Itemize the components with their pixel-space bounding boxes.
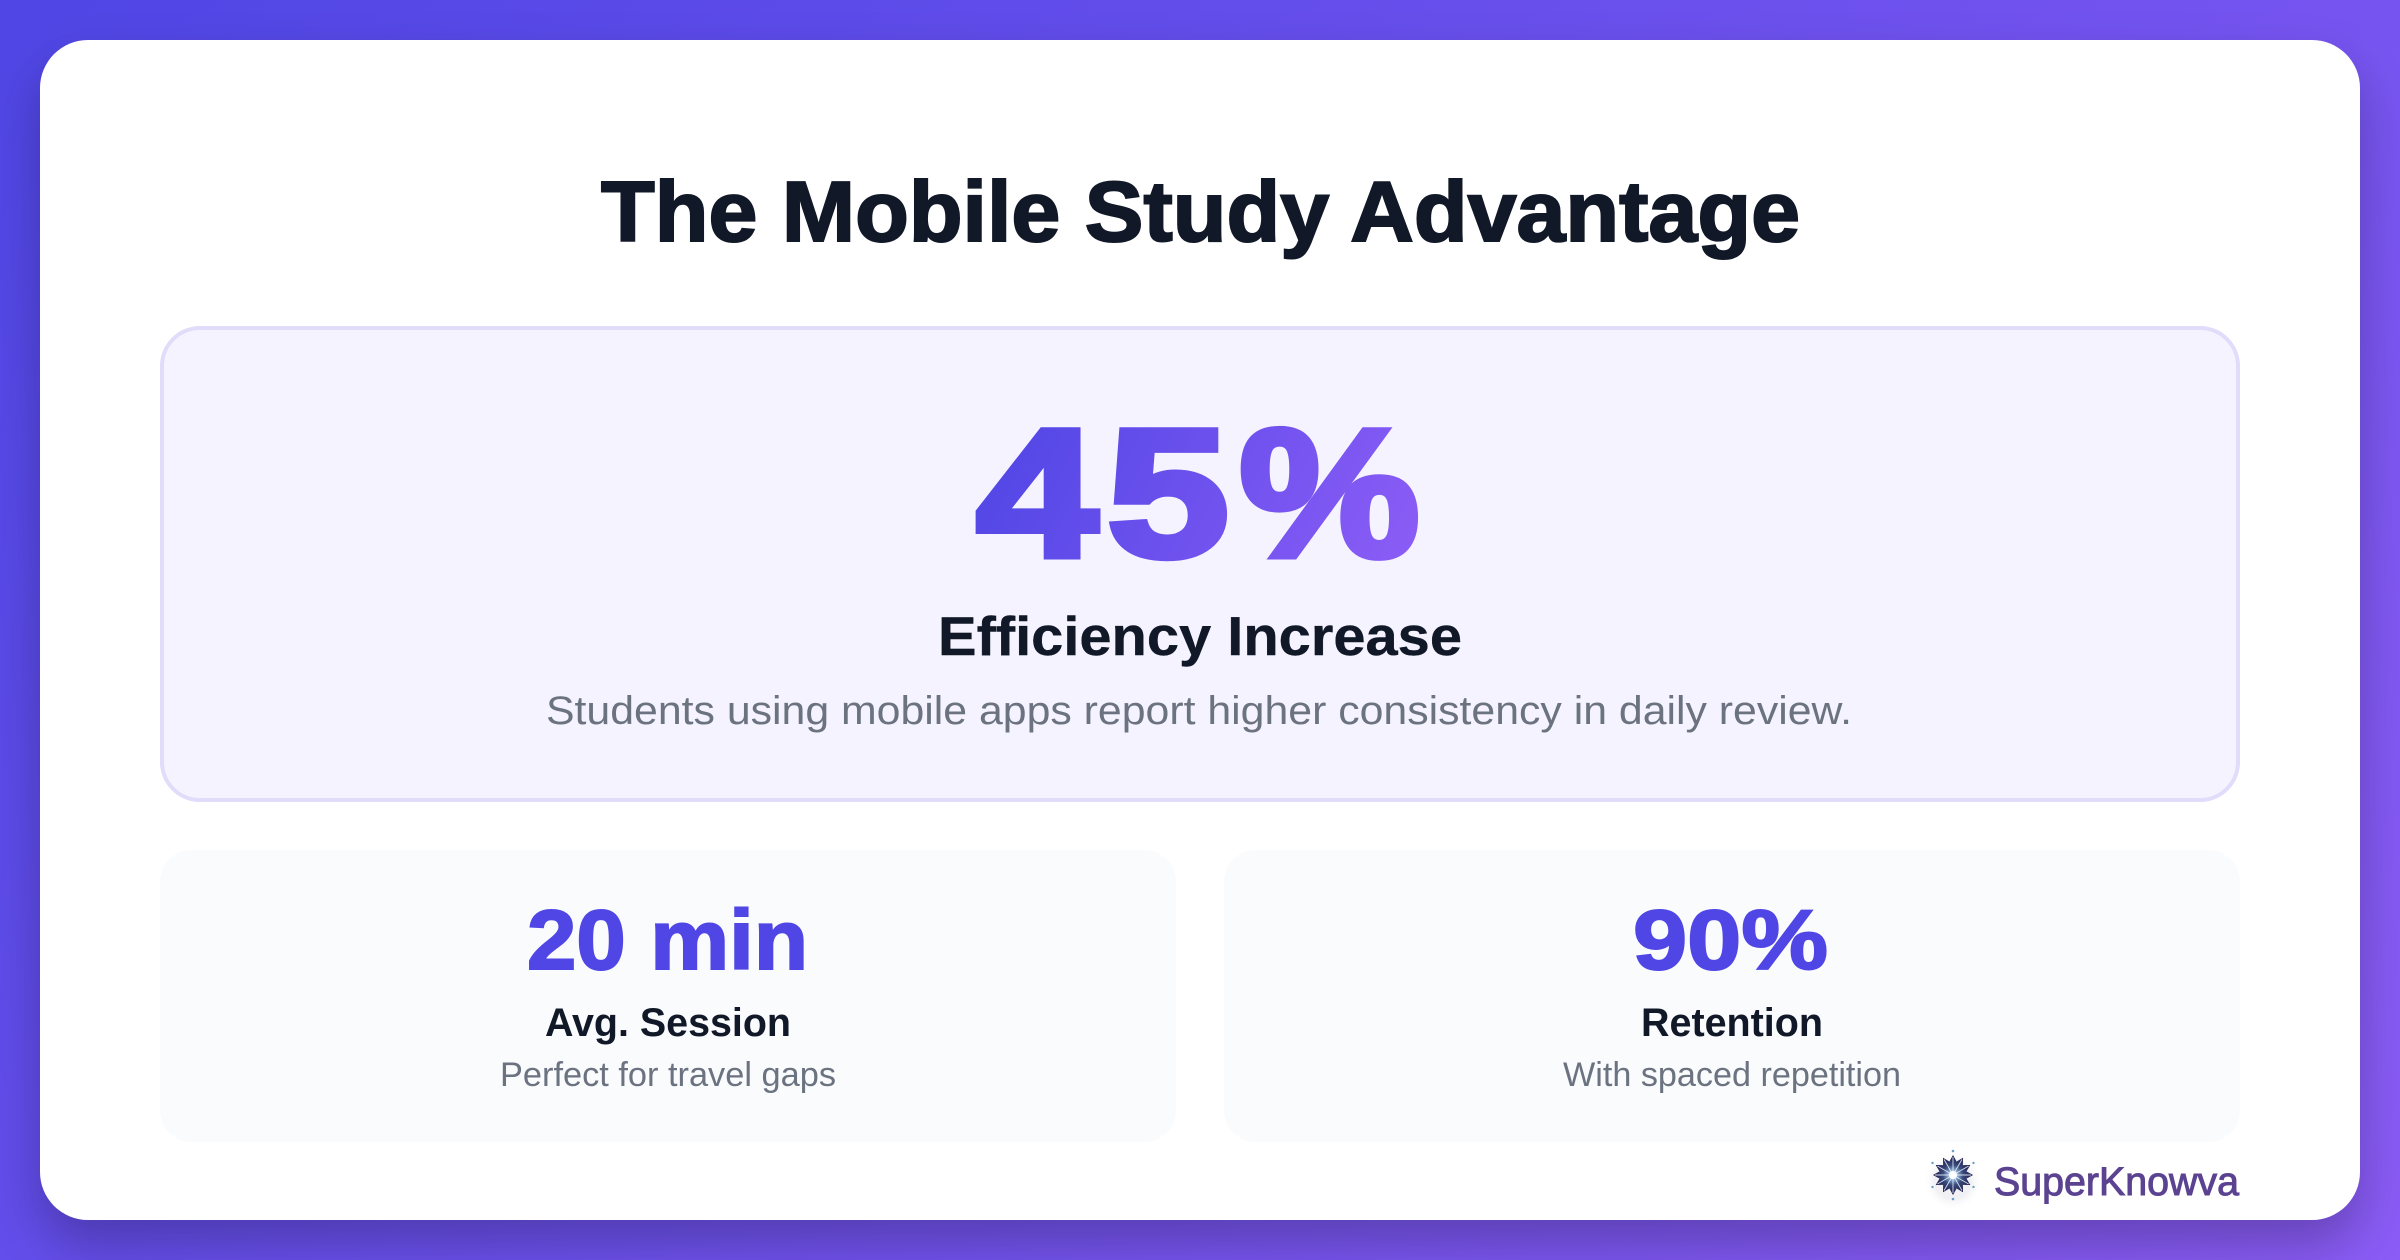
hero label: Efficiency Increase — [938, 605, 1462, 667]
retention description: With spaced repetition — [1563, 1056, 1901, 1094]
panel: average session stat — [160, 850, 1176, 1142]
retention label: Retention — [1641, 1001, 1823, 1045]
panel: retention stat — [1224, 850, 2240, 1142]
brand logo — [1923, 1150, 2240, 1211]
icon: star emblem — [1923, 1150, 1983, 1211]
hero number 45%: % — [1240, 391, 1420, 595]
retention panel background — [1224, 850, 2240, 1142]
hero number 45%: 5 — [1107, 391, 1229, 595]
retention number: 90% — [1633, 893, 1828, 987]
hero description: Students using mobile apps report higher consistency in daily review. — [546, 689, 1852, 733]
panel: hero stat — [162, 328, 2238, 800]
hero panel background — [162, 328, 2238, 800]
session panel background — [160, 850, 1176, 1142]
session description: Perfect for travel gaps — [500, 1056, 836, 1094]
brand name: SuperKnowva — [1994, 1160, 2240, 1204]
title: The Mobile Study Advantage — [601, 165, 1800, 260]
hero number 45%: 4 — [976, 391, 1098, 595]
session number: 20 min — [527, 893, 808, 987]
session label: Avg. Session — [545, 1001, 791, 1045]
